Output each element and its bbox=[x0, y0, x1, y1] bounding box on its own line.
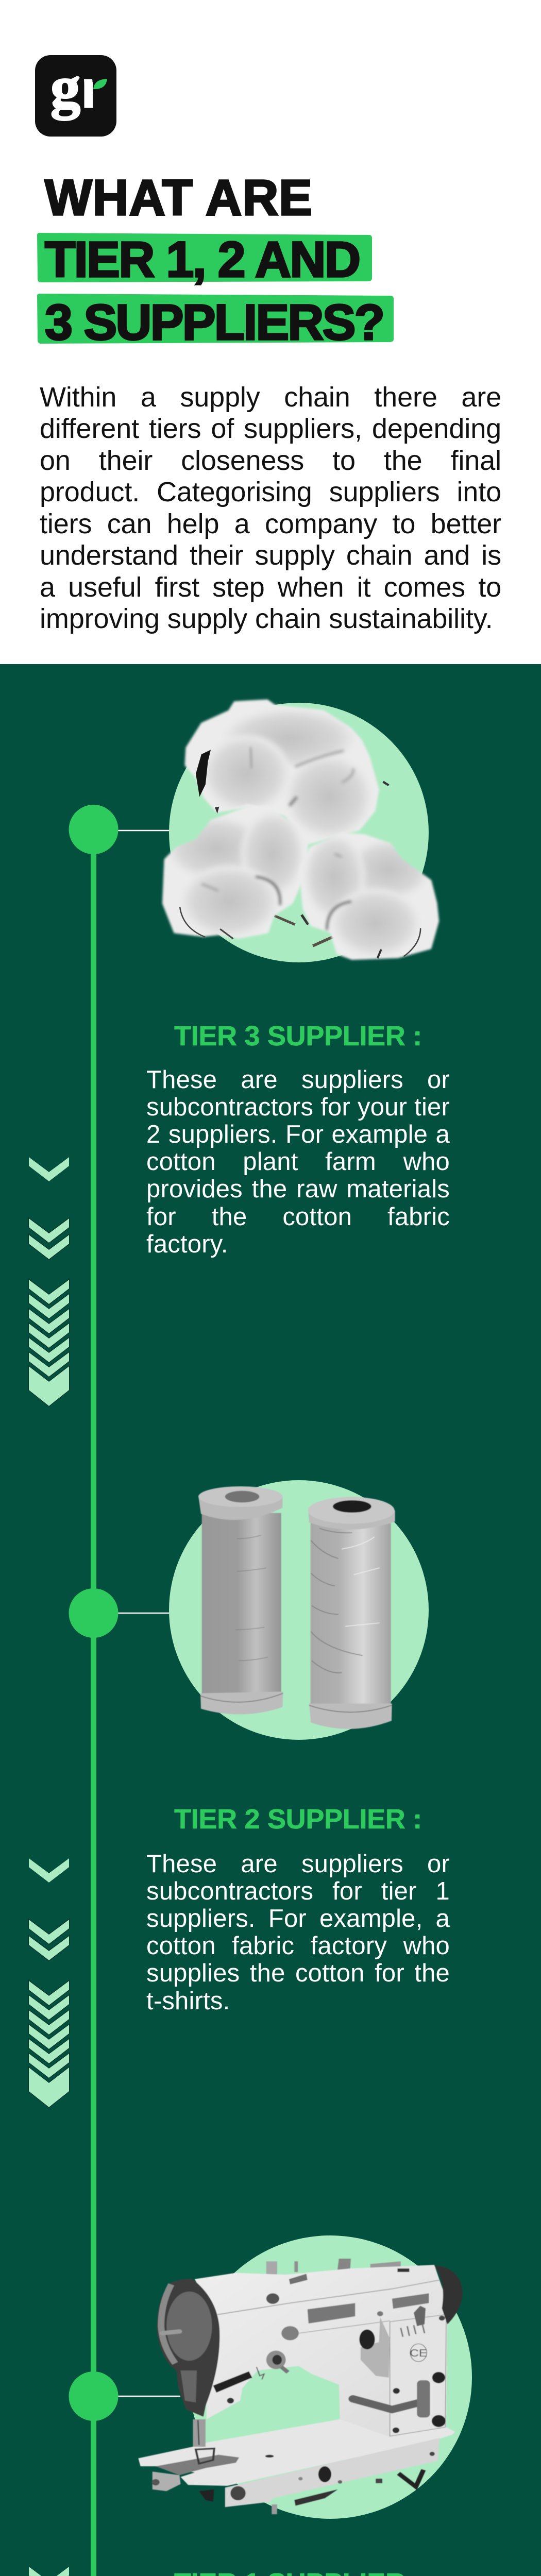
text block: introduction: a useful first step when it comes to bbox=[40, 572, 501, 603]
text block: tier 3 description: factory. bbox=[146, 1230, 228, 1258]
heading: tier 3 supplier: TIER 3 SUPPLIER : bbox=[174, 1021, 422, 1052]
text block: tier 2 description: These are suppliers or bbox=[146, 1850, 450, 1877]
panel: white header bbox=[0, 0, 541, 664]
text block: introduction: tiers can help a company to better bbox=[40, 508, 501, 539]
text block: tier 3 description: subcontractors for your tier bbox=[146, 1093, 450, 1121]
title bbox=[37, 170, 394, 348]
title: TIER 1, 2 AND bbox=[45, 231, 361, 287]
arrows: chevron stack tier 3 bbox=[28, 1157, 70, 1407]
text block: tier 3 description: cotton plant farm who bbox=[146, 1148, 450, 1176]
timeline with nodes bbox=[69, 805, 180, 2576]
title: WHAT ARE bbox=[45, 170, 312, 226]
text block: tier 3 description: provides the raw materials bbox=[146, 1175, 450, 1203]
icon: greenly app logo bbox=[35, 55, 116, 137]
text block: tier 2 description: cotton fabric factory who bbox=[146, 1932, 450, 1960]
text block: tier 3 description: 2 suppliers. For example a bbox=[146, 1121, 450, 1148]
icon: sewing machine: CE bbox=[410, 2347, 427, 2359]
icon: thread spools bbox=[169, 1480, 429, 1740]
icon: greenly app logo: g bbox=[50, 55, 80, 121]
icon: greenly app logo: r bbox=[81, 61, 102, 118]
text block: introduction bbox=[40, 381, 501, 634]
arrows: chevron stack tier 1 bbox=[29, 2567, 69, 2576]
text block: introduction: different tiers of suppliers, depending bbox=[40, 413, 501, 444]
text block: introduction: product. Categorising suppliers into bbox=[40, 477, 501, 507]
heading: tier 2 supplier: TIER 2 SUPPLIER : bbox=[174, 1804, 422, 1835]
text block: tier 3 description: These are suppliers or bbox=[146, 1065, 450, 1093]
icon: sewing machine bbox=[138, 2235, 472, 2519]
text block: tier 2 description: t-shirts. bbox=[146, 1987, 230, 2015]
text block: tier 3 description: for the cotton fabric bbox=[146, 1203, 450, 1231]
text block: introduction: understand their supply chain and is bbox=[40, 540, 501, 571]
text block: introduction: improving supply chain sustainability. bbox=[40, 603, 493, 634]
arrows: chevron stack tier 2 bbox=[28, 1858, 70, 2108]
text block: tier 2 description: subcontractors for tier 1 bbox=[146, 1877, 450, 1905]
text block: tier 2 description bbox=[146, 1850, 450, 2015]
text block: introduction: Within a supply chain there are bbox=[40, 381, 501, 412]
text block: tier 2 description: supplies the cotton for the bbox=[146, 1959, 450, 1987]
text block: tier 3 description bbox=[146, 1065, 450, 1258]
icon: cotton bolls bbox=[161, 698, 441, 962]
text block: introduction: on their closeness to the final bbox=[40, 445, 501, 476]
text block: tier 2 description: suppliers. For example, a bbox=[146, 1905, 450, 1933]
panel: dark green supply chain section bbox=[0, 664, 541, 2576]
